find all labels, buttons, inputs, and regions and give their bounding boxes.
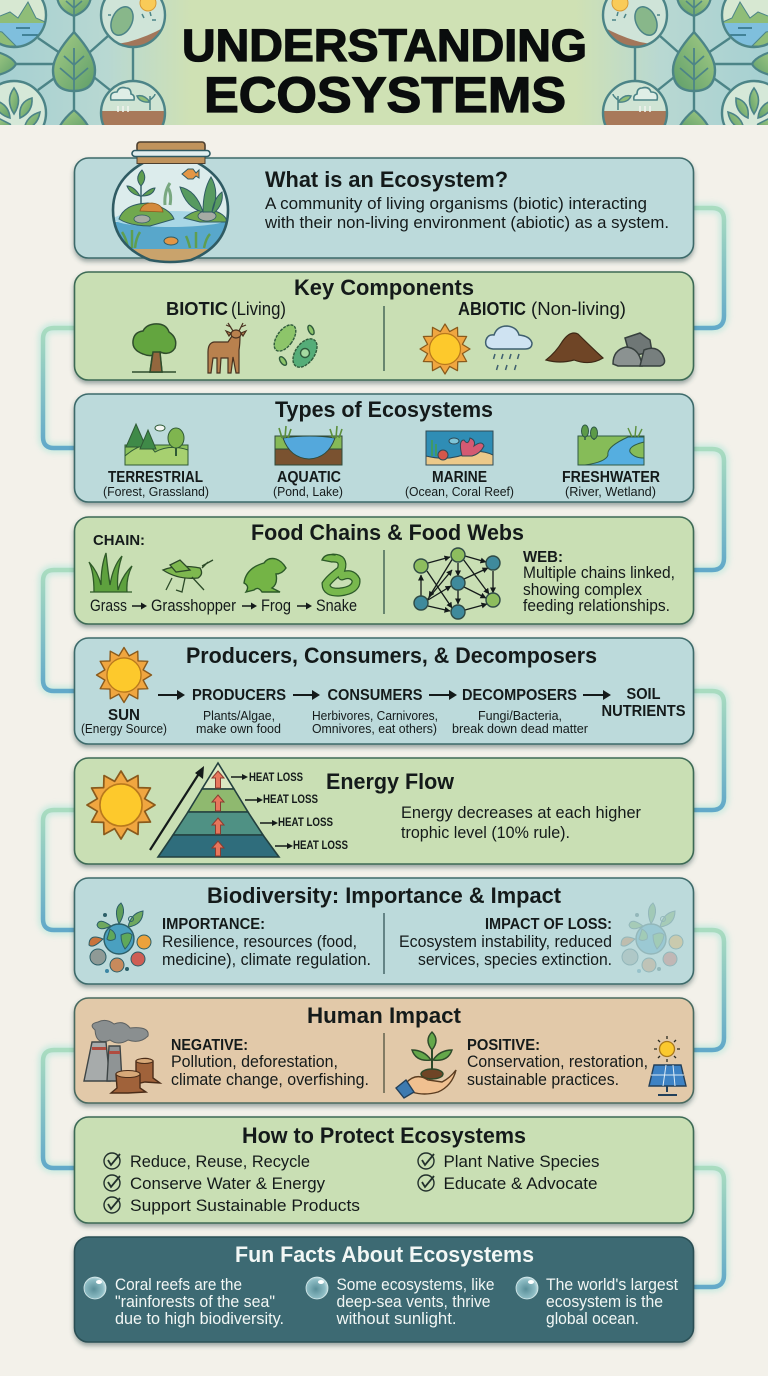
heading: Types of Ecosystems [275,397,493,422]
heading: Key Components [294,275,474,300]
icon: grass [89,553,132,592]
heading: Energy Flow [326,769,455,794]
description [401,803,641,842]
producers: make own food [196,721,281,736]
decomposers: DECOMPOSERS [462,687,577,704]
icon: factory and stumps [84,1020,160,1093]
icon: bubble [306,1277,328,1299]
sun label: (Energy Source) [81,721,167,736]
fact 2: without sunlight. [336,1309,456,1328]
icon: faded globe [621,903,683,973]
icon: forest landscape [125,424,188,465]
icon: bacteria [270,321,322,372]
heading: Human Impact [307,1003,462,1028]
icon: rocks [613,333,665,366]
chain text: Grasshopper [151,596,236,615]
heat loss labels: HEAT LOSS [278,817,333,829]
producers: Plants/Algae, [203,708,275,723]
panel: key components [74,272,694,380]
impact of loss text: IMPACT OF LOSS: [485,916,612,933]
description [264,194,669,232]
panel: types of ecosystems [74,394,694,502]
icon: tree [132,324,176,372]
soil nutrients [602,686,686,720]
negative text: climate change, overfishing. [171,1070,369,1089]
fact 2: deep-sea vents, thrive [336,1292,490,1311]
fact 1: due to high biodiversity. [115,1309,284,1328]
biotic label: (Living) [231,299,286,319]
icon: sun and solar panel [649,1036,686,1095]
fact 2 [306,1275,494,1328]
decomposers: Fungi/Bacteria, [478,708,562,723]
title: UNDERSTANDING [182,20,587,71]
negative text: Pollution, deforestation, [171,1052,338,1071]
type: terrestrial: (Forest, Grassland) [103,484,209,499]
biotic label: BIOTIC [166,299,228,319]
decorative left eco network [0,0,166,125]
web description: showing complex [523,580,642,599]
icon: coral reef [426,431,493,465]
importance text: medicine), climate regulation. [162,950,371,969]
sun label: SUN [108,707,140,724]
icon: sun [96,648,152,702]
icon: river [578,425,644,465]
heat loss labels: HEAT LOSS [263,794,318,806]
icon: hand holding seedling [396,1032,456,1098]
web description [523,549,675,615]
decorative right eco network [602,0,768,125]
decomposers: break down dead matter [452,721,589,736]
web description: feeding relationships. [523,596,670,615]
fact 1 [84,1275,284,1328]
type: freshwater [562,425,660,499]
icon: food web diagram [414,548,500,619]
soil nutrients: NUTRIENTS [602,703,686,720]
checklist right column: Educate & Advocate [444,1174,598,1193]
checklist left column [104,1152,360,1215]
panel: human impact [74,998,694,1103]
icon: grasshopper [163,560,213,592]
abiotic label: (Non-living) [531,299,626,319]
icon: vibrant globe [89,903,151,973]
fact 3 [516,1275,678,1328]
heat loss labels: HEAT LOSS [249,772,303,784]
consumers [312,687,438,736]
title: ECOSYSTEMS [204,67,566,123]
chain label: CHAIN: [93,532,145,549]
icon: sun [87,771,155,839]
checklist right column [418,1152,600,1193]
icon: snake [322,555,356,592]
arrows [158,690,611,700]
fact 3: ecosystem is the [546,1292,663,1311]
abiotic label [458,299,626,319]
description: Energy decreases at each higher [401,803,641,822]
negative text [171,1037,369,1089]
type: aquatic: AQUATIC [277,469,341,486]
description: A community of living organisms (biotic) interacting [265,194,647,213]
heading: Producers, Consumers, & Decomposers [186,643,597,668]
consumers: Herbivores, Carnivores, [312,708,438,723]
icon: pond [275,426,342,465]
chain text [90,596,357,615]
producers [192,687,286,736]
heat loss labels [231,772,348,852]
heading: Fun Facts About Ecosystems [235,1242,534,1267]
sun label [81,707,167,736]
fact 3: global ocean. [546,1309,639,1328]
type: terrestrial [103,424,209,499]
description: with their non-living environment (abiotic) as a system. [264,213,669,232]
description: trophic level (10% rule). [401,823,570,842]
impact of loss text [399,916,612,969]
panel: energy flow [74,758,694,864]
type: terrestrial: TERRESTRIAL [108,469,203,486]
heading: What is an Ecosystem? [265,167,508,192]
panel: producers, consumers and decomposers [74,638,694,744]
type: aquatic: (Pond, Lake) [273,484,343,499]
type: marine: (Ocean, Coral Reef) [405,484,514,499]
impact of loss text: Ecosystem instability, reduced [399,932,612,951]
checklist right column: Plant Native Species [444,1152,600,1171]
producers: PRODUCERS [192,687,286,704]
fact 3: The world's largest [546,1275,678,1294]
positive text: POSITIVE: [467,1037,540,1054]
icon: bubble [84,1277,106,1299]
negative text: NEGATIVE: [171,1037,248,1054]
web description: WEB: [523,549,563,566]
checklist left column: Support Sustainable Products [130,1196,360,1215]
importance text [162,916,371,969]
checklist left column: Conserve Water & Energy [130,1174,325,1193]
importance text: IMPORTANCE: [162,916,265,933]
title [182,20,587,123]
heading: How to Protect Ecosystems [242,1123,526,1148]
panel: fun facts [74,1237,694,1342]
type: freshwater: (River, Wetland) [565,484,656,499]
icon: terrarium jar [110,142,232,264]
chart: energy pyramid [150,763,279,857]
fact 2: Some ecosystems, like [336,1275,494,1294]
positive text: Conservation, restoration, [467,1052,648,1071]
importance text: Resilience, resources (food, [162,932,357,951]
panel: biodiversity [74,878,694,984]
type: marine: MARINE [432,469,487,486]
web description: Multiple chains linked, [523,563,675,582]
chain text: Frog [261,596,291,615]
fact 1: Coral reefs are the [115,1275,242,1294]
connector lines between panels [43,208,724,1287]
decomposers [452,687,589,736]
chain text: Grass [90,596,127,615]
consumers: CONSUMERS [328,687,423,704]
type: aquatic [273,426,343,499]
icon: sun [420,324,470,374]
fact 1: "rainforests of the sea" [115,1292,275,1311]
panel: what is an ecosystem [74,142,694,264]
icon: bubble [516,1277,538,1299]
soil nutrients: SOIL [626,686,661,703]
heat loss labels: HEAT LOSS [293,840,348,852]
chain text: Snake [316,596,357,615]
biotic label [166,299,286,319]
type: freshwater: FRESHWATER [562,469,660,486]
abiotic label: ABIOTIC [458,299,526,319]
type: marine [405,431,514,499]
checklist left column: Reduce, Reuse, Recycle [130,1152,310,1171]
panel: how to protect ecosystems [74,1117,694,1223]
heading: Food Chains & Food Webs [251,520,524,545]
impact of loss text: services, species extinction. [418,950,612,969]
positive text [467,1037,648,1089]
consumers: Omnivores, eat others) [312,721,437,736]
positive text: sustainable practices. [467,1070,619,1089]
header banner [0,0,768,125]
icon: deer [208,323,246,373]
icon: soil mound [546,333,603,363]
icon: rain cloud [486,326,532,370]
panel: food chains and food webs [74,517,694,624]
heading: Biodiversity: Importance & Impact [207,883,562,908]
icon: frog [244,558,286,592]
